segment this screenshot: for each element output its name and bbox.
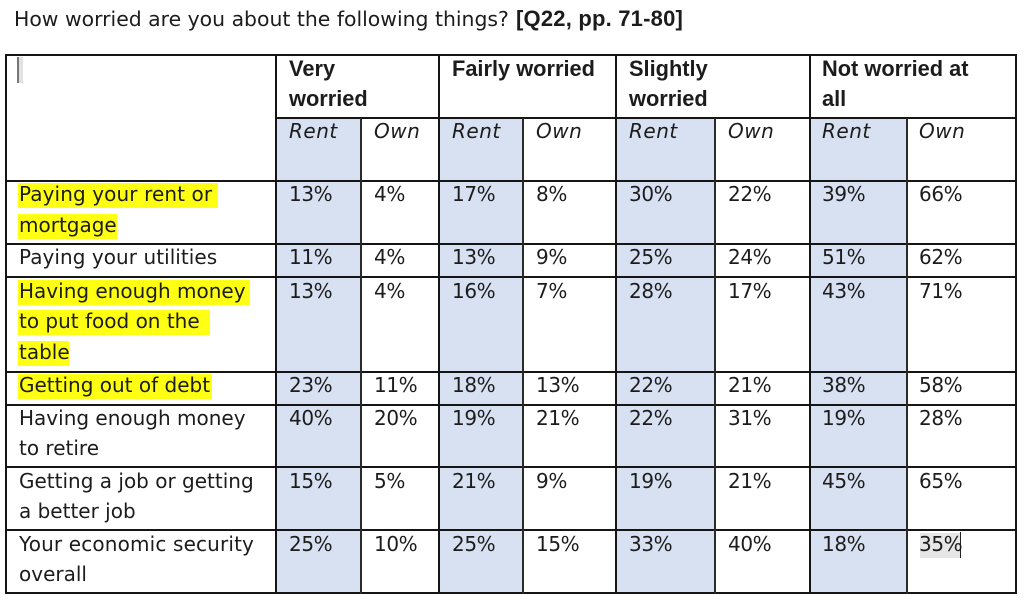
row: money to retire: 19% bbox=[452, 406, 495, 430]
row: economic security: overall bbox=[19, 562, 87, 586]
row: money to retire: 21% bbox=[536, 406, 579, 430]
header row: Not worried at bbox=[822, 56, 969, 81]
header row: Very bbox=[289, 56, 335, 81]
row: money to retire: 22% bbox=[629, 406, 672, 430]
row: paying utilities: 62% bbox=[919, 245, 962, 269]
row: money to retire: 31% bbox=[728, 406, 771, 430]
row: economic security: 40% bbox=[728, 532, 771, 556]
row: economic security: 25% bbox=[289, 532, 332, 556]
row: economic security: 18% bbox=[822, 532, 865, 556]
row: getting out of debt: 58% bbox=[919, 373, 962, 397]
row: paying utilities: 11% bbox=[289, 245, 332, 269]
row: economic security: 15% bbox=[536, 532, 579, 556]
row: job: 21% bbox=[452, 469, 495, 493]
row: food on the table: 7% bbox=[536, 279, 567, 303]
row: food on the table: table bbox=[19, 340, 70, 364]
row: job: a better job bbox=[19, 499, 136, 523]
row: paying rent or mortgage: Paying your rent or bbox=[19, 182, 212, 206]
row: paying rent or mortgage: 4% bbox=[374, 182, 405, 206]
row: job: 5% bbox=[374, 469, 405, 493]
row: food on the table: Having enough money bbox=[19, 279, 246, 303]
header row: Own bbox=[728, 119, 774, 143]
row: getting out of debt: Getting out of debt bbox=[19, 373, 210, 397]
row: food on the table: 43% bbox=[822, 279, 865, 303]
row: getting out of debt: 22% bbox=[629, 373, 672, 397]
row: job: Getting a job or getting bbox=[19, 469, 254, 493]
row: getting out of debt: 13% bbox=[536, 373, 579, 397]
header row: all bbox=[822, 86, 846, 111]
row: food on the table: to put food on the bbox=[19, 309, 200, 333]
header row: worried bbox=[289, 86, 368, 111]
row: economic security: 33% bbox=[629, 532, 672, 556]
row: money to retire: 20% bbox=[374, 406, 417, 430]
row: paying rent or mortgage: mortgage bbox=[19, 213, 117, 237]
row: money to retire: 19% bbox=[822, 406, 865, 430]
row: economic security: 35% bbox=[919, 532, 962, 556]
row: economic security bbox=[19, 532, 962, 586]
row: food on the table: 16% bbox=[452, 279, 495, 303]
row: job: 21% bbox=[728, 469, 771, 493]
header row: worried bbox=[629, 86, 708, 111]
row: paying rent or mortgage: 13% bbox=[289, 182, 332, 206]
row: paying rent or mortgage: 22% bbox=[728, 182, 771, 206]
row: money to retire: to retire bbox=[19, 436, 99, 460]
row: paying utilities bbox=[19, 245, 962, 269]
title: [Q22, pp. 71-80] bbox=[516, 6, 683, 31]
row: food on the table: 13% bbox=[289, 279, 332, 303]
title: How worried are you about the following things? bbox=[14, 7, 509, 31]
row: getting out of debt: 23% bbox=[289, 373, 332, 397]
row: getting out of debt bbox=[18, 373, 962, 399]
header row: Slightly bbox=[629, 56, 708, 81]
row: food on the table bbox=[18, 279, 962, 366]
row: getting out of debt: 38% bbox=[822, 373, 865, 397]
header row: Fairly worried bbox=[452, 56, 595, 81]
header row: Rent bbox=[822, 119, 871, 143]
row: paying utilities: Paying your utilities bbox=[19, 245, 217, 269]
row: food on the table: 17% bbox=[728, 279, 771, 303]
row: paying utilities: 4% bbox=[374, 245, 405, 269]
row: getting out of debt: 21% bbox=[728, 373, 771, 397]
row: paying utilities: 13% bbox=[452, 245, 495, 269]
row: paying rent or mortgage: 17% bbox=[452, 182, 495, 206]
header row: Rent bbox=[452, 119, 501, 143]
row: food on the table: 28% bbox=[629, 279, 672, 303]
row: economic security: Your economic security bbox=[19, 532, 254, 556]
row: paying rent or mortgage bbox=[18, 182, 962, 239]
header row: Own bbox=[919, 119, 965, 143]
row: paying rent or mortgage: 8% bbox=[536, 182, 567, 206]
row: job: 45% bbox=[822, 469, 865, 493]
row: paying utilities: 9% bbox=[536, 245, 567, 269]
row: money to retire: 40% bbox=[289, 406, 332, 430]
row: getting out of debt: 11% bbox=[374, 373, 417, 397]
header row: Rent bbox=[289, 119, 338, 143]
row: job: 9% bbox=[536, 469, 567, 493]
row: paying utilities: 51% bbox=[822, 245, 865, 269]
row: money to retire: 28% bbox=[919, 406, 962, 430]
row: paying rent or mortgage: 30% bbox=[629, 182, 672, 206]
header row: Own bbox=[536, 119, 582, 143]
row: food on the table: 4% bbox=[374, 279, 405, 303]
header row bbox=[17, 56, 969, 143]
row: getting out of debt: 18% bbox=[452, 373, 495, 397]
row: job bbox=[19, 469, 962, 523]
row: paying utilities: 25% bbox=[629, 245, 672, 269]
row: job: 65% bbox=[919, 469, 962, 493]
row: money to retire: Having enough money bbox=[19, 406, 246, 430]
row: job: 19% bbox=[629, 469, 672, 493]
header row: Own bbox=[374, 119, 420, 143]
row: paying rent or mortgage: 66% bbox=[919, 182, 962, 206]
row: job: 15% bbox=[289, 469, 332, 493]
row: economic security: 10% bbox=[374, 532, 417, 556]
row: money to retire bbox=[19, 406, 962, 460]
row: paying rent or mortgage: 39% bbox=[822, 182, 865, 206]
row: economic security: 25% bbox=[452, 532, 495, 556]
row: food on the table: 71% bbox=[919, 279, 962, 303]
row: paying utilities: 24% bbox=[728, 245, 771, 269]
header row: Rent bbox=[629, 119, 678, 143]
